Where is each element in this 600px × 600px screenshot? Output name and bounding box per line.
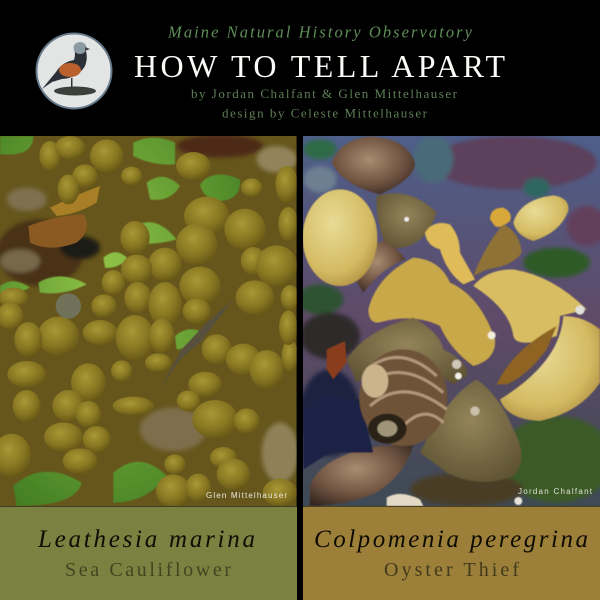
species name: Colpomenia peregrina: Colpomenia peregrina <box>314 526 588 553</box>
photo credit: Jordan Chalfant: Jordan Chalfant <box>518 487 593 496</box>
organization name: Maine Natural History Observatory <box>167 22 473 42</box>
main title: HOW TO TELL APART <box>134 48 505 84</box>
photo: Colpomenia peregrina <box>297 136 600 506</box>
designer credit: design by Celeste Mittelhauser <box>222 106 428 120</box>
common name: Oyster Thief: Oyster Thief <box>384 559 519 581</box>
label panel: Colpomenia peregrina <box>303 506 600 600</box>
label panel: Leathesia marina <box>0 506 297 600</box>
photo: Leathesia marina <box>0 134 299 508</box>
olive seaweed blobs <box>0 136 299 508</box>
authors credit: by Jordan Chalfant & Glen Mittelhauser <box>191 86 458 101</box>
common name: Sea Cauliflower: Sea Cauliflower <box>65 559 231 581</box>
photo credit: Glen Mittelhauser: Glen Mittelhauser <box>206 491 287 500</box>
green sea lettuce patches <box>0 136 240 506</box>
logo: harlequin duck medallion <box>36 34 112 108</box>
species name: Leathesia marina: Leathesia marina <box>37 526 255 553</box>
